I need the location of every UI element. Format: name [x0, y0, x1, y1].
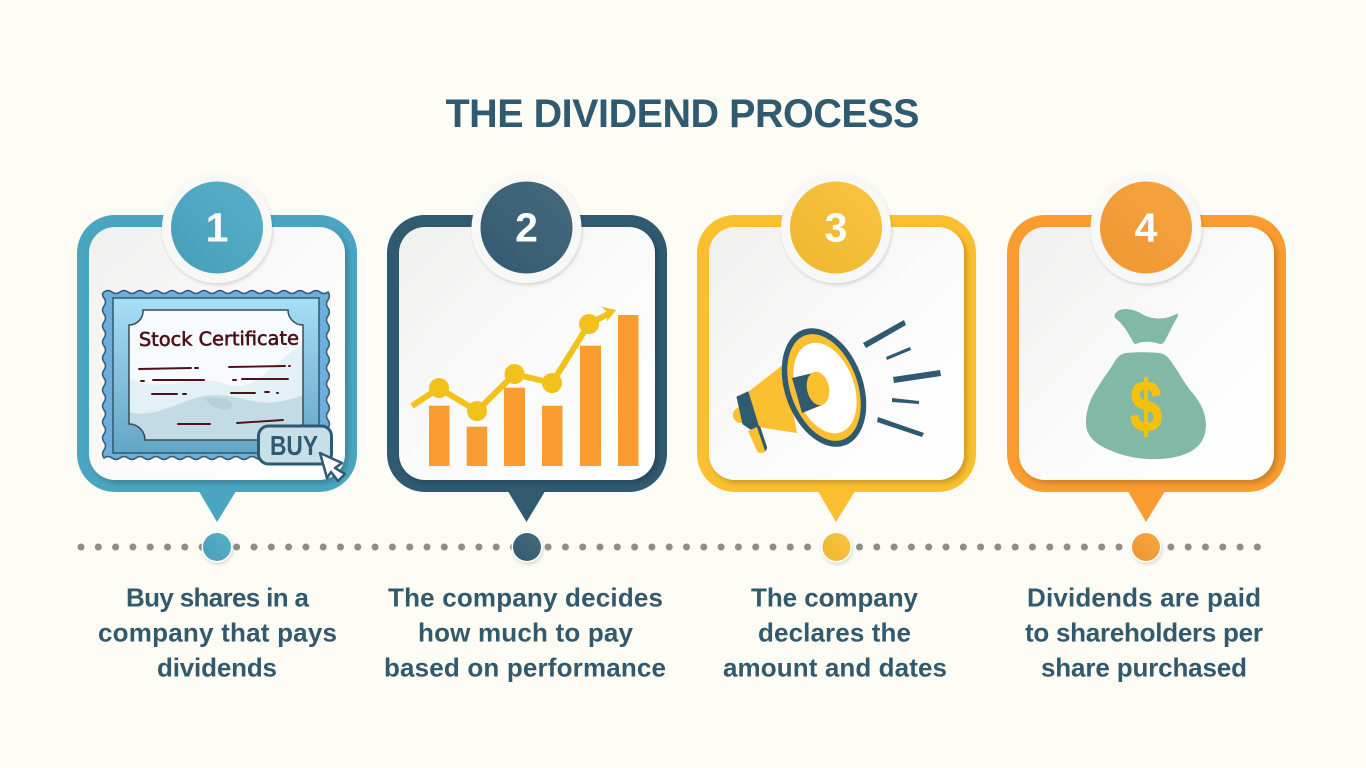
caption 2: based on performance: [384, 652, 666, 682]
timeline marker 3: [821, 532, 852, 562]
caption 4: share purchased: [1041, 652, 1247, 682]
caption 2: how much to pay: [418, 618, 634, 648]
panel: step 1: [77, 173, 357, 682]
number badge 1: 1: [206, 204, 228, 250]
caption 1: dividends: [157, 652, 277, 682]
certificate lines: [139, 366, 290, 424]
card frame 1: [77, 215, 357, 522]
caption 4: Dividends are paid: [1027, 582, 1261, 612]
card frame 4: [1007, 215, 1286, 522]
buy button: [258, 426, 332, 464]
number badge 3: [781, 173, 891, 283]
caption 2: The company decides: [388, 582, 663, 612]
number badge 1: [162, 173, 272, 283]
buy button: BUY: [270, 430, 318, 461]
number badge 4: [1090, 172, 1202, 284]
icon: money bag: [1086, 309, 1206, 459]
bars: [429, 315, 638, 466]
caption 1: Buy shares in a: [126, 582, 310, 612]
timeline marker 1: [202, 532, 232, 562]
icon: money bag: $: [1130, 367, 1162, 447]
number badge 2: 2: [515, 204, 538, 250]
trend line and arrow: [412, 307, 616, 421]
number badge 4: 4: [1135, 204, 1158, 250]
panel: step 3: [697, 173, 976, 682]
caption 1: [98, 582, 337, 682]
card frame 3: [697, 215, 976, 522]
title: THE DIVIDEND PROCESS: [446, 92, 920, 136]
timeline dotted line: [81, 544, 1258, 550]
panel: step 4: [1007, 172, 1286, 682]
caption 2: [384, 582, 666, 682]
caption 3: [723, 582, 947, 682]
number badge 3: 3: [825, 204, 847, 250]
caption 3: The company: [751, 582, 919, 612]
caption 3: amount and dates: [723, 652, 947, 682]
card frame 2: [387, 215, 667, 522]
icon: megaphone: [733, 316, 941, 459]
caption 3: declares the: [758, 618, 911, 648]
timeline marker 2: [512, 532, 542, 562]
bar chart: [412, 307, 638, 466]
sound rays: [863, 320, 941, 437]
number badge 2: [472, 173, 582, 283]
caption 1: company that pays: [98, 618, 337, 648]
caption 4: to shareholders per: [1025, 618, 1263, 648]
certificate heading: Stock Certificate: [139, 328, 299, 351]
icon: stock certificate: [102, 290, 345, 481]
cursor: [320, 453, 345, 481]
panel: step 2: [384, 173, 667, 682]
timeline marker 4: [1130, 532, 1162, 562]
caption 4: [1025, 582, 1263, 682]
